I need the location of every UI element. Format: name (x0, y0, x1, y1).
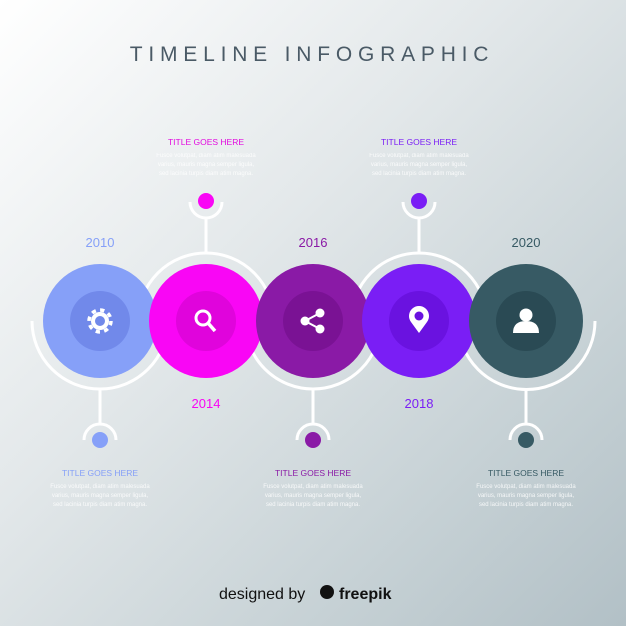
circle 1 (43, 264, 157, 378)
title: TIMELINE INFOGRAPHIC (130, 43, 494, 66)
text blocks: Fusce volutpat, diam atim malesuada (156, 153, 256, 159)
footer (219, 585, 392, 603)
icon: user (513, 308, 539, 333)
years (86, 235, 540, 411)
footer: designed by (219, 586, 305, 603)
icon: share (300, 308, 324, 334)
text blocks: TITLE GOES HERE (168, 137, 244, 147)
text blocks: TITLE GOES HERE (275, 468, 351, 478)
years: 2018 (405, 396, 433, 411)
text blocks: Fusce volutpat, diam atim malesuada (263, 484, 363, 490)
years: 2014 (192, 396, 220, 411)
text blocks (50, 137, 576, 508)
circle 4 (362, 264, 476, 378)
circle 2 (149, 264, 263, 378)
text blocks: sed lacinia turpis diam atim magna. (372, 171, 466, 177)
text blocks: Fusce volutpat, diam atim malesuada (369, 153, 469, 159)
circle 3 (256, 264, 370, 378)
text blocks: varius, mauris magna semper ligula, (158, 162, 255, 168)
text blocks: TITLE GOES HERE (62, 468, 138, 478)
text blocks: Fusce volutpat, diam atim malesuada (476, 484, 576, 490)
icon: search (196, 311, 215, 331)
years: 2020 (512, 235, 540, 250)
connector arcs (32, 202, 595, 440)
text blocks: sed lacinia turpis diam atim magna. (53, 502, 147, 508)
icon: pin (409, 306, 429, 333)
text blocks: varius, mauris magna semper ligula, (52, 493, 149, 499)
text blocks: TITLE GOES HERE (488, 468, 564, 478)
text blocks: TITLE GOES HERE (381, 137, 457, 147)
icon: gear (89, 310, 111, 332)
footer: freepik (339, 586, 392, 603)
years: 2016 (299, 235, 327, 250)
text blocks: varius, mauris magna semper ligula, (265, 493, 362, 499)
text blocks: sed lacinia turpis diam atim magna. (479, 502, 573, 508)
text blocks: sed lacinia turpis diam atim magna. (266, 502, 360, 508)
dots (92, 193, 534, 448)
circle 5 (469, 264, 583, 378)
text blocks: varius, mauris magna semper ligula, (371, 162, 468, 168)
years: 2010 (86, 235, 114, 250)
text blocks: sed lacinia turpis diam atim magna. (159, 171, 253, 177)
text blocks: varius, mauris magna semper ligula, (478, 493, 575, 499)
text blocks: Fusce volutpat, diam atim malesuada (50, 484, 150, 490)
